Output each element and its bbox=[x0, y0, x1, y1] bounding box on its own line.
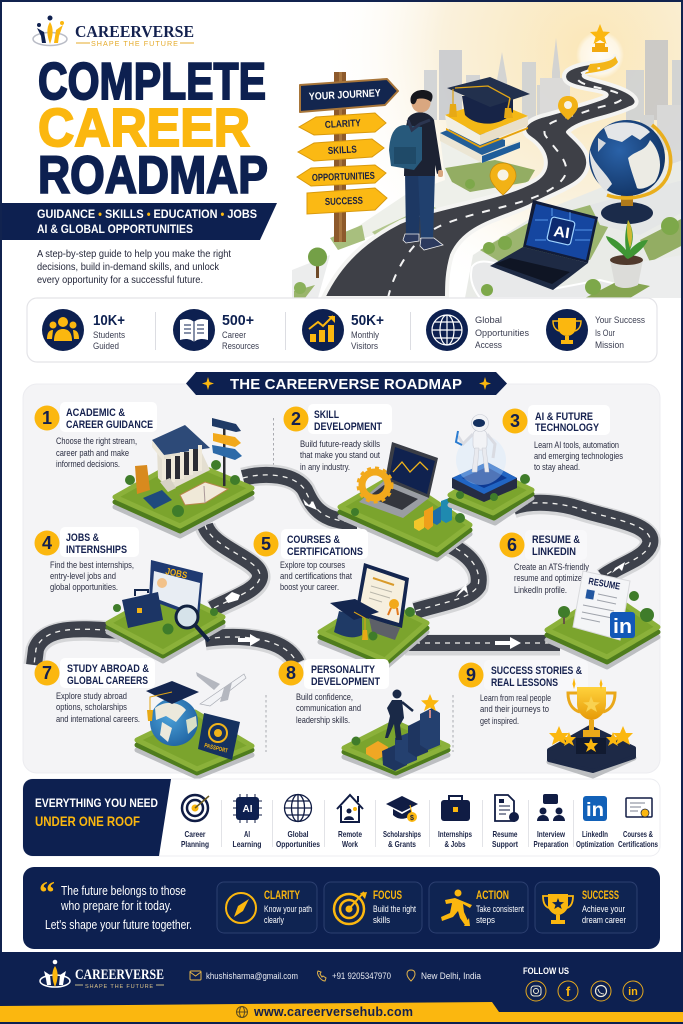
sign: opportunities: OPPORTUNITIES bbox=[312, 171, 375, 184]
website band bbox=[0, 1002, 683, 1022]
quote mark: “ bbox=[39, 874, 55, 910]
step 4: jobs and internships: Find the best internships, bbox=[50, 559, 134, 570]
step 6: resume and linkedin: resume and optimize bbox=[514, 572, 582, 583]
card: action: steps bbox=[476, 915, 495, 926]
badge 6: 6 bbox=[507, 535, 517, 555]
step 5: courses and certifications: boost your career. bbox=[280, 581, 339, 592]
label highlight bbox=[304, 659, 389, 689]
step 3: AI and future technology: AI & FUTURE bbox=[535, 411, 593, 423]
label highlight bbox=[60, 658, 155, 688]
step 5: courses and certifications: and certifications that bbox=[280, 570, 352, 581]
item: AI learning bbox=[232, 794, 262, 849]
tile 7: globe, plane, passport: PASSPORT bbox=[204, 743, 228, 755]
sign: clarity: CLARITY bbox=[325, 118, 361, 131]
step 5: courses and certifications: Explore top courses bbox=[280, 559, 345, 570]
social: whatsapp bbox=[591, 981, 611, 1001]
badge 9: 9 bbox=[466, 665, 476, 685]
tile 6: resume bbox=[547, 571, 658, 667]
everything under one roof panel bbox=[23, 779, 660, 856]
illustration: books stack bbox=[440, 100, 528, 163]
step 1: academic and career guidance: CAREER GUIDANCE bbox=[66, 419, 153, 431]
intro text: A step-by-step guide to help you make the right bbox=[37, 248, 231, 260]
label highlight bbox=[484, 660, 588, 690]
stat: monthly visitors: Monthly bbox=[351, 330, 379, 341]
label highlight bbox=[528, 405, 610, 435]
step 8: personality development: DEVELOPMENT bbox=[311, 676, 380, 688]
quote text: who prepare for it today. bbox=[60, 899, 172, 913]
badge 8: 8 bbox=[286, 663, 296, 683]
item: interview preparation: Interview bbox=[537, 830, 565, 839]
step 2: skill development: that make you stand out bbox=[300, 449, 380, 460]
step 4: jobs and internships: global opportunities. bbox=[50, 581, 118, 592]
card: action: ACTION bbox=[476, 890, 509, 902]
step 2: skill development: SKILL bbox=[314, 409, 339, 421]
item: global opportunities: Opportunities bbox=[276, 840, 320, 849]
stat: your success: Mission bbox=[595, 340, 624, 351]
social: facebook: f bbox=[566, 984, 571, 999]
stat: students guided: Guided bbox=[93, 341, 119, 352]
contact: location: New Delhi, India bbox=[421, 971, 482, 982]
item: internships and jobs: Internships bbox=[438, 830, 472, 839]
contact: phone: +91 9205347970 bbox=[332, 971, 391, 982]
step 3: AI and future technology: Learn AI tools, automation bbox=[534, 439, 619, 450]
card: clarity: CLARITY bbox=[264, 890, 300, 902]
website band: www.careerversehub.com bbox=[253, 1005, 413, 1019]
item: linkedin optimization bbox=[576, 796, 614, 849]
item: resume support bbox=[492, 795, 519, 849]
card: success: Achieve your bbox=[582, 904, 625, 915]
item: interview preparation: Preparation bbox=[534, 840, 568, 849]
card: success: dream career bbox=[582, 915, 626, 926]
item: career planning: Planning bbox=[181, 840, 209, 849]
tile 4: jobs board: JOBS bbox=[164, 566, 188, 582]
step 6: resume and linkedin: LINKEDIN bbox=[532, 546, 576, 558]
item: remote work: Remote bbox=[338, 830, 362, 839]
illustration: sun behind star bbox=[576, 31, 624, 79]
stat: global opportunities: Opportunities bbox=[475, 328, 529, 339]
illustration: student with backpack bbox=[389, 90, 443, 250]
badge 4: 4 bbox=[42, 533, 52, 553]
card: action: Take consistent bbox=[476, 904, 524, 915]
stat: career resources bbox=[173, 309, 259, 352]
subtitle banner: GUIDANCE • SKILLS • EDUCATION • JOBS bbox=[37, 207, 257, 221]
subtitle banner: AI & GLOBAL OPPORTUNITIES bbox=[37, 222, 193, 236]
item: courses and certifications: Certifications bbox=[618, 840, 658, 849]
quote text: The future belongs to those bbox=[61, 884, 186, 898]
step 1: academic and career guidance: Choose the right stream, bbox=[56, 435, 137, 446]
stat: career resources: 500+ bbox=[222, 312, 254, 329]
subtitle banner bbox=[0, 203, 277, 240]
roadmap heading bbox=[186, 372, 507, 395]
roadmap panel bbox=[23, 384, 660, 773]
item: global opportunities: Global bbox=[288, 830, 308, 839]
item: AI learning: Learning bbox=[232, 840, 262, 849]
step 9: success stories and real lessons: REAL LESSONS bbox=[491, 677, 558, 689]
social: instagram bbox=[526, 981, 546, 1001]
step 6: resume and linkedin: RESUME & bbox=[532, 534, 580, 546]
illustration: star goal bbox=[590, 24, 610, 52]
step 2: skill development: DEVELOPMENT bbox=[314, 421, 382, 433]
card: focus: FOCUS bbox=[373, 890, 402, 902]
illustration: small trees bbox=[294, 179, 679, 296]
stat: career resources: Resources bbox=[222, 341, 259, 352]
card: clarity: Know your path bbox=[264, 904, 312, 915]
stat: global opportunities: Access bbox=[475, 340, 502, 351]
step 1: academic and career guidance bbox=[34, 402, 157, 469]
tile 5: certificate bbox=[320, 563, 427, 668]
item: resume support: Support bbox=[492, 840, 518, 849]
intro text: every opportunity for a successful future. bbox=[37, 274, 203, 286]
panel: navy label: EVERYTHING YOU NEED bbox=[35, 796, 158, 810]
tile 8: climbing stairs bbox=[344, 690, 448, 777]
title: ROADMAP bbox=[38, 146, 268, 205]
tile 3: robot on platform bbox=[450, 414, 532, 523]
item: internships and jobs bbox=[438, 796, 472, 849]
badge 7: 7 bbox=[42, 663, 52, 683]
step 9: success stories and real lessons: get inspired. bbox=[480, 715, 519, 726]
illustration: ground and grass bbox=[292, 134, 683, 298]
sign: skills bbox=[298, 139, 384, 161]
contact: location bbox=[407, 970, 482, 982]
title: CAREER bbox=[38, 98, 250, 158]
sign: skills: SKILLS bbox=[328, 144, 357, 157]
illustration: city skyline bbox=[424, 38, 682, 180]
item: internships and jobs: & Jobs bbox=[444, 840, 466, 849]
illustration: AI laptop bbox=[490, 200, 598, 290]
step 9: success stories and real lessons: Learn from real people bbox=[480, 692, 551, 703]
stat: your success: Is Our bbox=[595, 328, 616, 339]
step 1: academic and career guidance: informed decisions. bbox=[56, 458, 120, 469]
step 2: skill development: Build future-ready skills bbox=[300, 438, 380, 449]
quote panel bbox=[23, 867, 660, 949]
roadmap winding roads bbox=[34, 475, 650, 665]
step 7: study abroad and global careers: and international careers. bbox=[56, 713, 140, 724]
step 2: skill development bbox=[284, 404, 392, 472]
item: linkedin optimization: Optimization bbox=[576, 840, 614, 849]
footer logo bbox=[40, 960, 164, 990]
title: COMPLETE bbox=[38, 53, 266, 111]
label highlight bbox=[60, 527, 139, 557]
step 8: personality development: Build confidence, bbox=[296, 691, 353, 702]
step 4: jobs and internships: JOBS & bbox=[66, 532, 99, 544]
intro text bbox=[37, 248, 231, 286]
step 4: jobs and internships bbox=[34, 527, 139, 592]
stat: your success bbox=[546, 309, 645, 351]
step 9: success stories and real lessons: SUCCESS STORIES & bbox=[491, 665, 582, 677]
card: success bbox=[535, 882, 637, 933]
step 1: academic and career guidance: ACADEMIC & bbox=[66, 407, 125, 419]
step 6: resume and linkedin: Create an ATS-friendly bbox=[514, 561, 589, 572]
logo tagline: SHAPE THE FUTURE bbox=[91, 41, 179, 48]
badge 3: 3 bbox=[510, 411, 520, 431]
item: linkedin optimization: LinkedIn bbox=[582, 830, 608, 839]
panel: navy label bbox=[23, 779, 171, 856]
item: resume support: Resume bbox=[492, 830, 518, 839]
item: scholarships and grants: Scholarships bbox=[383, 830, 421, 839]
step 3: AI and future technology: and emerging technologies bbox=[534, 450, 623, 461]
step 7: study abroad and global careers: STUDY ABROAD & bbox=[67, 663, 149, 675]
item: scholarships and grants: $ bbox=[410, 815, 414, 822]
illustration: map pin near bbox=[490, 163, 516, 195]
badge 1: 1 bbox=[42, 408, 52, 428]
sign: success bbox=[307, 188, 387, 214]
social: linkedin: in bbox=[628, 986, 638, 998]
step 4: jobs and internships: entry-level jobs and bbox=[50, 570, 116, 581]
step 9: success stories and real lessons bbox=[458, 660, 588, 726]
roadmap heading: THE CAREERVERSE ROADMAP bbox=[230, 376, 462, 393]
sign: clarity bbox=[299, 113, 386, 135]
title bbox=[38, 53, 268, 205]
panel: navy label: UNDER ONE ROOF bbox=[35, 813, 140, 829]
social: linkedin bbox=[623, 981, 643, 1001]
card: clarity: clearly bbox=[264, 915, 284, 926]
icon: linkedin: in bbox=[613, 616, 632, 638]
step 8: personality development bbox=[278, 659, 389, 725]
sign: opportunities bbox=[297, 165, 386, 186]
illustration: winding road bbox=[323, 56, 637, 298]
step 6: resume and linkedin: LinkedIn profile. bbox=[514, 584, 567, 595]
stat: your success: Your Success bbox=[595, 315, 645, 326]
dotted dividers bbox=[266, 418, 453, 752]
logo: careerverse bbox=[33, 16, 194, 48]
sign: your journey bbox=[300, 79, 398, 112]
step 3: AI and future technology: TECHNOLOGY bbox=[535, 422, 599, 434]
contact: email: khushisharma@gmail.com bbox=[206, 971, 298, 982]
step 7: study abroad and global careers: Explore study abroad bbox=[56, 690, 127, 701]
label highlight bbox=[308, 404, 392, 434]
step 8: personality development: PERSONALITY bbox=[311, 664, 375, 676]
quote text bbox=[45, 884, 192, 932]
card: action bbox=[429, 882, 528, 933]
step 9: success stories and real lessons: and their journeys to bbox=[480, 703, 549, 714]
stat: global opportunities: Global bbox=[475, 315, 502, 326]
card: focus bbox=[324, 882, 422, 933]
label highlight bbox=[60, 402, 157, 432]
step 4: jobs and internships: INTERNSHIPS bbox=[66, 544, 127, 556]
footer bbox=[0, 952, 683, 1024]
stat: students guided: 10K+ bbox=[93, 312, 125, 329]
item: courses and certifications: Courses & bbox=[623, 830, 653, 839]
item: AI learning: AI bbox=[244, 830, 250, 839]
card: clarity bbox=[217, 882, 317, 933]
tile 9: trophy on pedestal bbox=[549, 678, 634, 776]
tile 6: resume: RESUME bbox=[587, 576, 621, 593]
card: success: SUCCESS bbox=[582, 890, 619, 902]
step 7: study abroad and global careers bbox=[34, 658, 155, 724]
logo icon bbox=[33, 16, 67, 46]
stats panel bbox=[27, 298, 657, 362]
stat: monthly visitors bbox=[302, 309, 384, 352]
tile 2: laptop skills bbox=[340, 442, 470, 559]
header background glow bbox=[280, 0, 683, 300]
footer logo: CAREERVERSE bbox=[75, 967, 164, 983]
item: career planning: Career bbox=[184, 830, 206, 839]
step 7: study abroad and global careers: GLOBAL CAREERS bbox=[67, 675, 148, 687]
item: AI learning: AI bbox=[242, 804, 253, 815]
stat: global opportunities bbox=[426, 309, 529, 351]
badge 5: 5 bbox=[261, 534, 271, 554]
stat: students guided bbox=[42, 309, 125, 352]
sign: your journey: YOUR JOURNEY bbox=[309, 87, 381, 103]
step 5: courses and certifications: CERTIFICATIONS bbox=[287, 546, 363, 558]
step 7: study abroad and global careers: options, scholarships bbox=[56, 701, 127, 712]
item: interview preparation bbox=[534, 794, 568, 849]
item: career planning bbox=[181, 795, 209, 849]
intro text: decisions, build in-demand skills, and unlock bbox=[37, 261, 220, 273]
item: global opportunities bbox=[276, 794, 320, 849]
item: linkedin optimization: in bbox=[586, 800, 604, 821]
step 5: courses and certifications bbox=[254, 529, 368, 592]
step 6: resume and linkedin bbox=[500, 530, 589, 595]
footer logo: SHAPE THE FUTURE bbox=[85, 984, 154, 990]
step 2: skill development: in any industry. bbox=[300, 461, 350, 472]
social: facebook bbox=[558, 981, 578, 1001]
sign: success: SUCCESS bbox=[325, 196, 363, 208]
tile 4: jobs board bbox=[108, 560, 223, 661]
logo wordmark: CAREERVERSE bbox=[75, 22, 194, 41]
tile 1: university bbox=[115, 418, 252, 536]
stat: monthly visitors: 50K+ bbox=[351, 312, 384, 329]
step 3: AI and future technology: to stay ahead. bbox=[534, 461, 580, 472]
illustration: graduation cap bbox=[447, 77, 530, 124]
stat: monthly visitors: Visitors bbox=[351, 341, 378, 352]
badge 2: 2 bbox=[291, 409, 301, 429]
illustration: potted plant bbox=[606, 220, 648, 288]
card: focus: skills bbox=[373, 915, 390, 926]
step 8: personality development: leadership skills. bbox=[296, 714, 350, 725]
item: remote work: Work bbox=[342, 840, 358, 849]
label highlight bbox=[281, 529, 368, 559]
item: remote work bbox=[337, 795, 363, 849]
step 5: courses and certifications: COURSES & bbox=[287, 534, 340, 546]
quote text: Let's shape your future together. bbox=[45, 918, 192, 932]
illustration: globe on stand bbox=[589, 120, 671, 224]
label highlight bbox=[525, 530, 587, 560]
stat: students guided: Students bbox=[93, 330, 125, 341]
illustration: signpost bbox=[297, 72, 398, 242]
stat: career resources: Career bbox=[222, 330, 247, 341]
illustration: map pin far bbox=[558, 96, 578, 120]
step 1: academic and career guidance: career path and make bbox=[56, 447, 129, 458]
step 3: AI and future technology bbox=[502, 405, 623, 472]
illustration: AI laptop: AI bbox=[552, 223, 571, 242]
contact: phone bbox=[318, 971, 391, 982]
card: focus: Build the right bbox=[373, 904, 416, 915]
item: courses and certifications bbox=[618, 798, 658, 849]
tile 7: globe, plane, passport bbox=[137, 672, 252, 777]
item: scholarships and grants bbox=[383, 796, 421, 849]
step 8: personality development: communication and bbox=[296, 702, 361, 713]
item: scholarships and grants: & Grants bbox=[388, 840, 416, 849]
follow us: FOLLOW US bbox=[523, 966, 569, 977]
